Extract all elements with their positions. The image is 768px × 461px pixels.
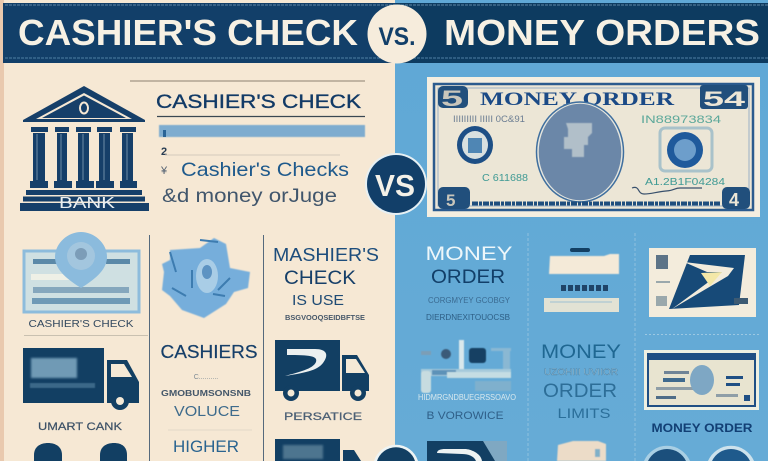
- text block: money order limits: ORDER: [543, 381, 617, 402]
- illustration: money order bill: [427, 77, 760, 217]
- top VS badge: VS.: [378, 23, 416, 51]
- text block: money order: CORGMYEY GCOBGY: [428, 296, 511, 305]
- panel: money order background: [395, 0, 768, 461]
- bill seal: left: [457, 126, 493, 164]
- text block: cashiers volume: CASHIERS: [160, 342, 258, 362]
- header banner: [3, 3, 768, 63]
- text block: cashier's check intro: 2: [161, 146, 167, 158]
- icon: bank building: [20, 86, 149, 212]
- text block: money order: MONEY: [426, 244, 513, 265]
- text block: money order: DIERDNEXITOUOCSB: [426, 313, 510, 322]
- title: money orders: MONEY ORDERS: [444, 12, 760, 53]
- text block: invoice: HIDMRGNDBUEGRSSOAVO: [418, 393, 516, 402]
- label: cashier's check: CASHIER'S CHECK: [28, 318, 134, 330]
- bill corner: bottom left: [438, 187, 470, 210]
- bottom VS badge: [374, 445, 418, 461]
- label: higher: HIGHER: [173, 438, 239, 456]
- text block: cashiers volume: [160, 342, 258, 430]
- text block: invoice: [418, 393, 516, 422]
- icon: blue shield emblem: [162, 238, 250, 318]
- label: money order: MONEY ORDER: [652, 421, 753, 435]
- bill corner: bottom left: 5: [446, 191, 455, 210]
- highlight bar: [159, 125, 365, 137]
- center VS badge: [365, 153, 427, 215]
- icon: numeric graphic: [421, 340, 511, 393]
- icon: delivery truck left: [23, 348, 139, 410]
- bill text: lower left serial: C 611688: [482, 173, 528, 184]
- text block: mashier's check: CHECK: [284, 268, 356, 289]
- text block: cashiers volume: C..........: [194, 374, 218, 381]
- text block: money order: ORDER: [431, 267, 505, 288]
- icon: postal eagle card: [649, 248, 756, 317]
- text block: money order limits: LIMITS: [558, 405, 610, 421]
- bill text: top left serial: IIIIIIIII IIIII 0C&91: [453, 114, 525, 124]
- icon: people silhouettes: [34, 443, 127, 461]
- text block: invoice: B VOROWICE: [426, 410, 504, 422]
- bank label: BANK: [59, 195, 116, 212]
- icon: stacked paper note: [544, 248, 619, 312]
- bill signature: [632, 187, 702, 194]
- bill corner: top left: 5: [441, 86, 463, 111]
- text block: cashiers volume: VOLUCE: [174, 403, 240, 420]
- bill portrait oval: [536, 102, 624, 202]
- text block: money order limits: MONEY: [541, 342, 621, 363]
- text block: cashiers volume: GMOBUMSONSNB: [161, 389, 251, 398]
- panel: cashier's check background: [0, 0, 396, 461]
- bill corner: top left: [438, 86, 468, 111]
- icon: cashier's check card: [24, 232, 139, 330]
- bill text: lower right serial: A1.2B1F04284: [645, 177, 726, 188]
- icon: truck cropped blue panel: [427, 441, 507, 461]
- text block: mashier's check: [273, 244, 379, 322]
- heading: cashier's check: CASHIER'S CHECK: [156, 91, 361, 113]
- text block: cashier's check intro: [130, 81, 365, 207]
- bill corner: top right: 54: [703, 88, 746, 111]
- label: left truck: UMART CANK: [38, 421, 123, 433]
- bill corner: bottom right: [722, 187, 750, 210]
- icon: paper stack cropped: [557, 441, 606, 461]
- icon: round badges: [644, 446, 754, 461]
- text block: mashier's check: MASHIER'S: [273, 244, 379, 265]
- bill text: green serial: IN88973834: [641, 114, 721, 126]
- label: right truck: PERSATICE: [284, 411, 362, 423]
- text block: money order limits: [541, 342, 621, 421]
- center VS badge: VS: [375, 168, 415, 203]
- text block: money order: [426, 244, 513, 322]
- text block: cashier's check intro: Cashier's Checks: [181, 159, 349, 181]
- icon: truck cropped at bottom: [275, 439, 361, 461]
- text block: mashier's check: BSGVOOQSEIDBFTSE: [285, 313, 365, 322]
- title: cashier's check: CASHIER'S CHECK: [18, 12, 358, 53]
- text block: cashier's check intro: &d money orJuge: [162, 185, 337, 207]
- column dividers: [24, 233, 760, 461]
- bill corner: top right: [700, 85, 748, 111]
- body text: ¥: [160, 165, 168, 177]
- bill seal: right: [660, 128, 712, 171]
- text block: mashier's check: IS USE: [292, 293, 344, 309]
- bill heading: MONEY ORDER: [480, 89, 674, 110]
- icon: delivery truck right: [275, 340, 369, 401]
- text block: money order limits: UZOHIII UVIIOR: [544, 367, 618, 378]
- icon: small money order check: [644, 350, 759, 410]
- top VS badge: [368, 4, 426, 64]
- bill corner: bottom right: 4: [729, 190, 739, 210]
